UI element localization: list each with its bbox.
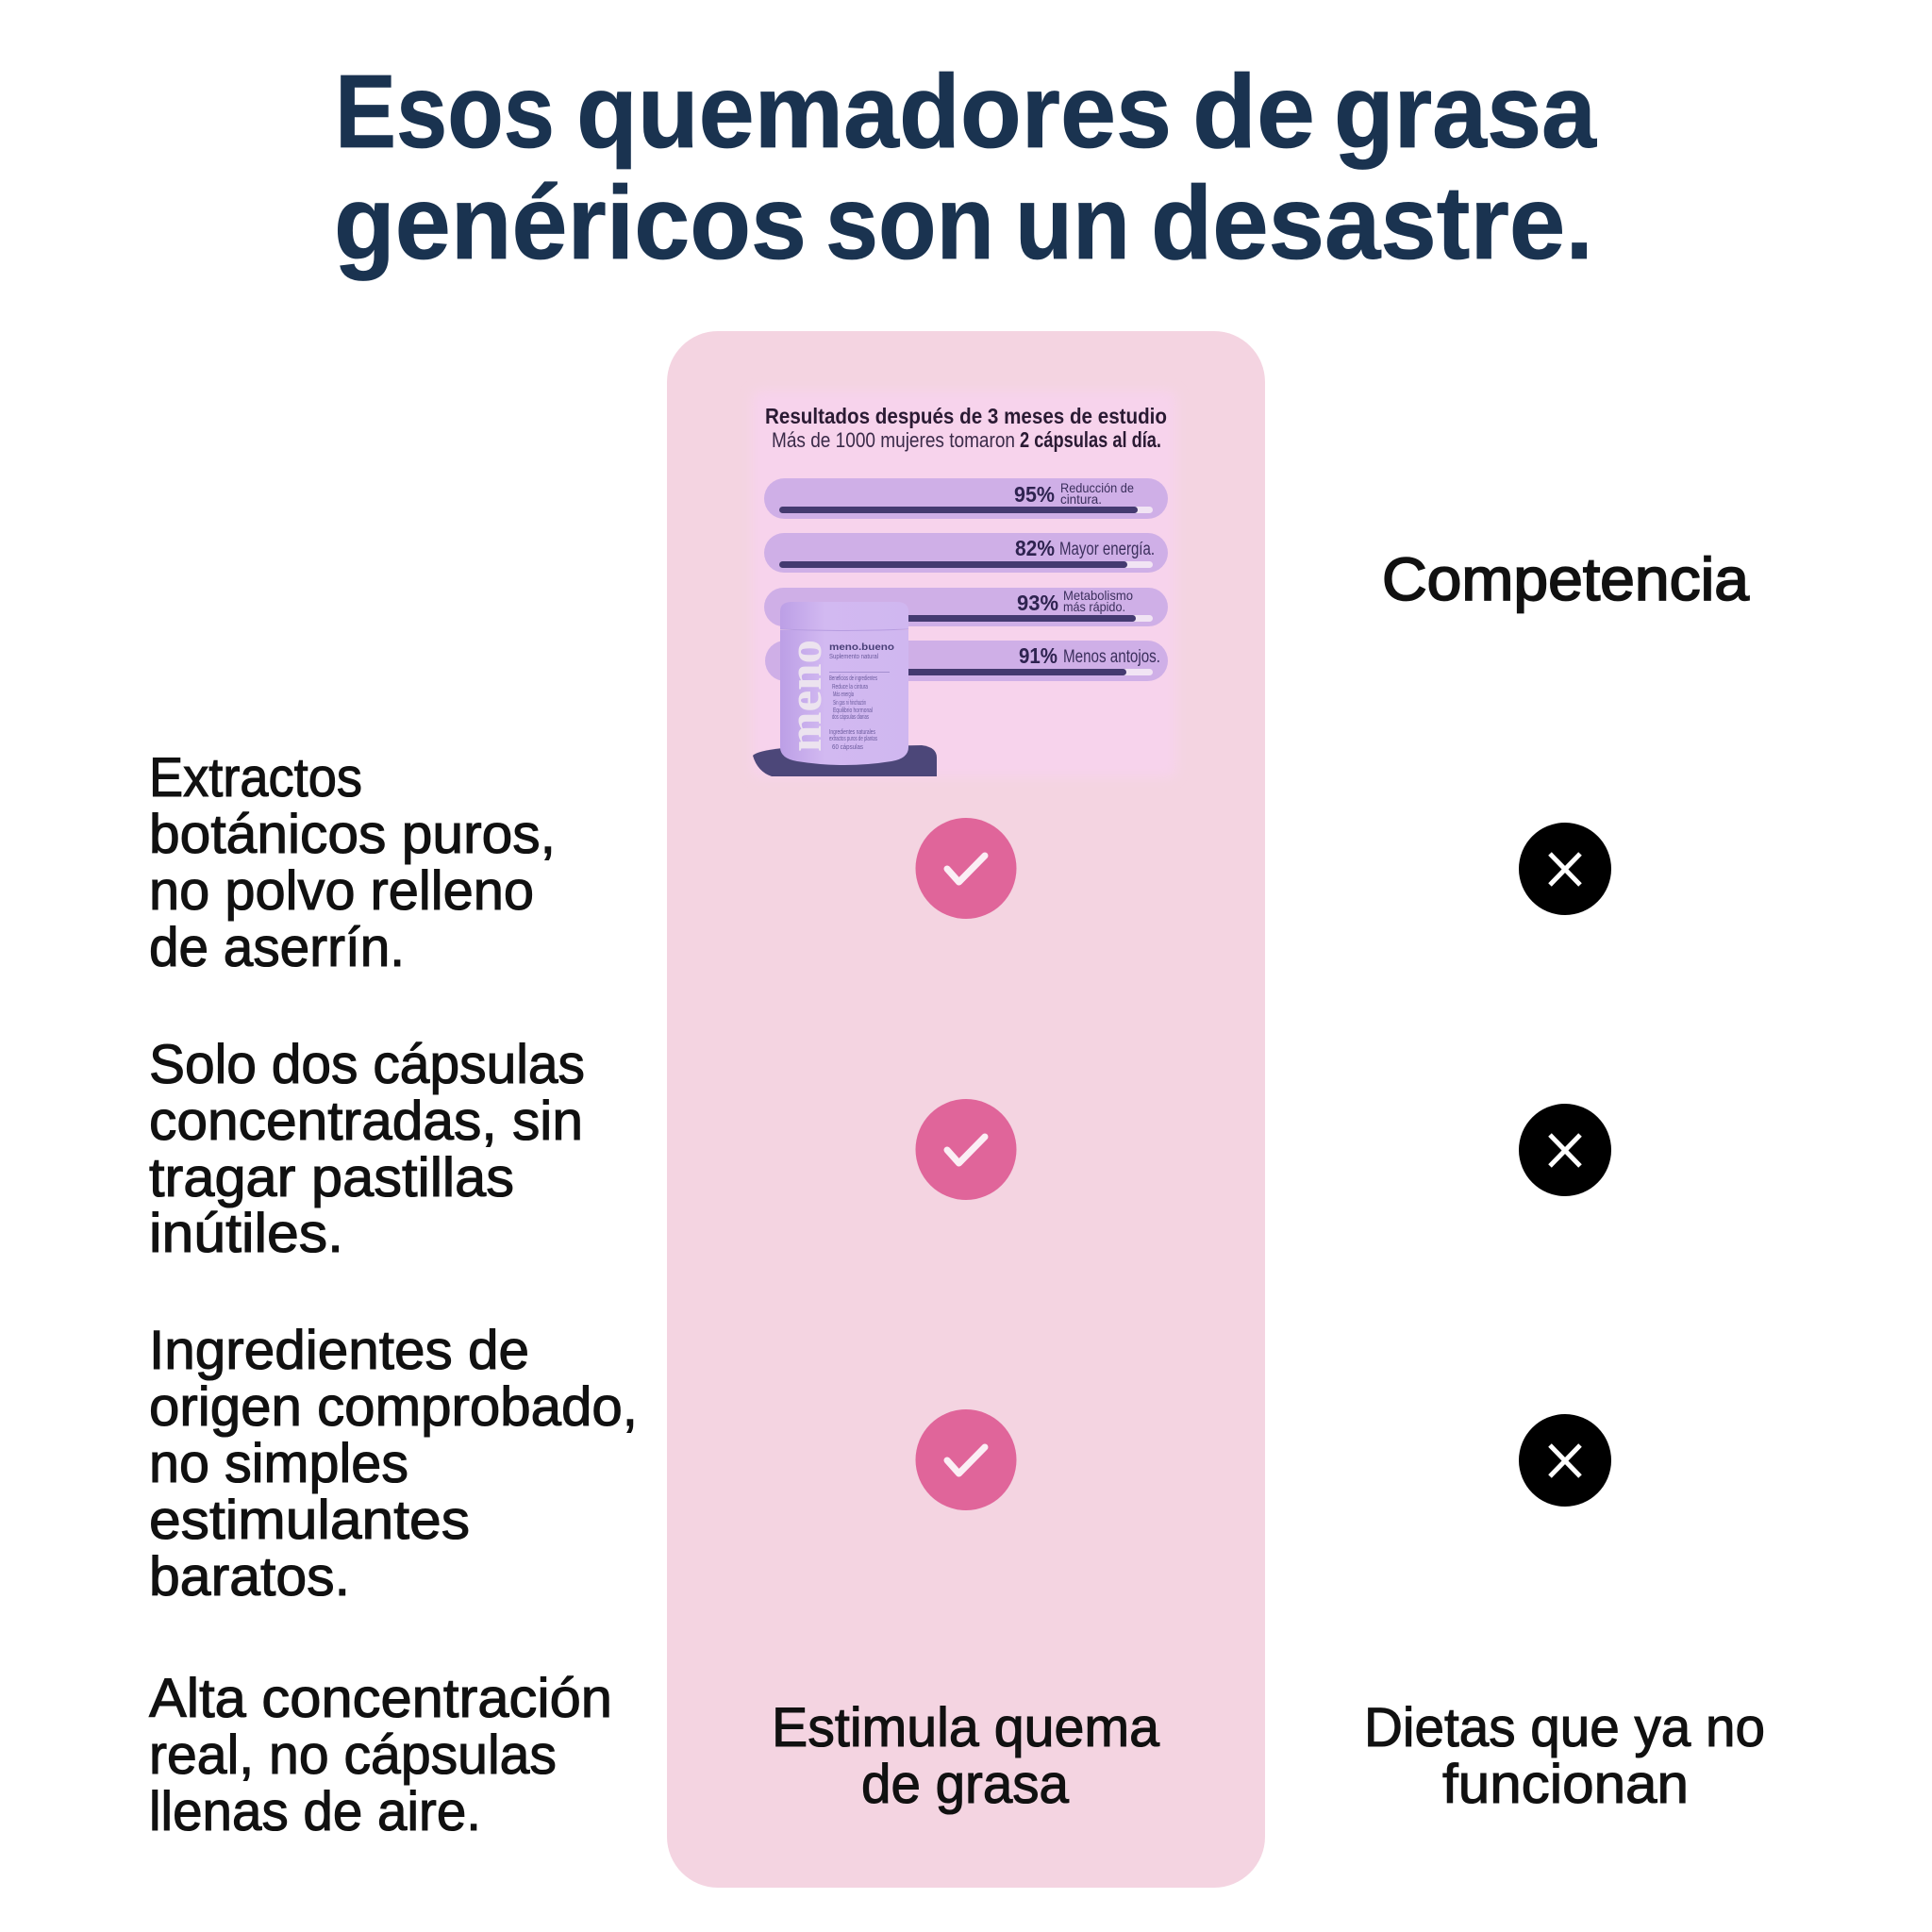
competitor column footer label: funcionan <box>1442 1754 1689 1815</box>
title <box>334 54 1597 281</box>
icon: cross row 2 <box>1519 1104 1611 1196</box>
image heading: 2 cápsulas al día. <box>1020 427 1161 452</box>
icon: cross row 1 <box>1519 823 1611 915</box>
title: Esos <box>335 54 555 170</box>
image heading <box>765 404 1167 452</box>
feature text 2: inútiles. <box>149 1203 343 1264</box>
stat bar: 82%: Mayor energía. <box>1059 540 1155 559</box>
feature text 3: Ingredientes de <box>149 1320 529 1381</box>
jar label text: Más energía <box>833 691 854 698</box>
feature text 1: de aserrín. <box>149 917 405 978</box>
jar label text: dos cápsulas diarias <box>832 714 869 721</box>
stat bar: 91%: Menos antojos. <box>1063 647 1160 667</box>
feature text 4: Alta concentración <box>149 1668 612 1729</box>
stat bar: 91%: 91% <box>1019 643 1058 668</box>
title: genéricos <box>334 165 807 281</box>
stat bar: 95% <box>764 478 1168 519</box>
jar label text: extractos puros de plantas <box>829 736 877 742</box>
jar label text: Sin gas ni hinchazón <box>833 700 866 707</box>
jar label text: Ingredientes naturales <box>829 729 875 736</box>
feature text 3: no simples <box>149 1433 408 1494</box>
feature text 3: estimulantes <box>149 1490 470 1551</box>
product column footer label <box>772 1697 1160 1815</box>
jar label text: Equilibrio hormonal <box>833 708 873 714</box>
stat bar: 95%: 95% <box>1014 482 1055 507</box>
product results image <box>752 391 1176 777</box>
stat bar: 93%: 93% <box>1017 591 1058 615</box>
jar vertical logo: meno <box>778 640 831 752</box>
stat bar: 82% <box>764 533 1168 573</box>
title: un <box>1015 165 1130 281</box>
feature text 3 <box>149 1320 638 1607</box>
title: grasa <box>1334 54 1597 170</box>
feature text 4: llenas de aire. <box>149 1781 481 1842</box>
jar label text: meno.bueno <box>829 642 894 653</box>
platform under jar <box>753 745 937 776</box>
feature text 2: concentradas, sin <box>149 1091 583 1152</box>
feature text 3: baratos. <box>149 1546 350 1607</box>
stat bar: 95%: cintura. <box>1060 491 1102 507</box>
image heading: Más de 1000 mujeres tomaron <box>772 428 1015 452</box>
feature text 1: Extractos <box>149 747 362 808</box>
feature text 3: origen comprobado, <box>149 1376 638 1438</box>
feature text 1: botánicos puros, <box>149 804 556 865</box>
icon: check row 2 <box>915 1099 1017 1200</box>
panel: product column <box>667 331 1265 1888</box>
icon: check row 1 <box>915 818 1017 919</box>
jar label text: 60 cápsulas <box>832 744 863 751</box>
stat bar: 82%: 82% <box>1015 536 1055 560</box>
feature text 2: tragar pastillas <box>149 1147 514 1208</box>
feature text 1: no polvo relleno <box>149 860 534 922</box>
title: de <box>1192 54 1315 170</box>
jar label text <box>829 642 894 751</box>
column heading: Competencia: Competencia <box>1382 545 1749 613</box>
stat bar: 93%: más rápido. <box>1063 599 1125 614</box>
image heading: Resultados después de 3 meses de estudio <box>765 404 1167 428</box>
jar label text: Reduce la cintura <box>832 684 868 691</box>
product column footer label: Estimula quema <box>772 1697 1160 1758</box>
stat bar: 93%: Metabolismo <box>1063 588 1133 603</box>
feature text 2 <box>149 1034 585 1264</box>
feature text 4 <box>149 1668 612 1842</box>
feature text 1 <box>149 747 556 978</box>
stat bar: 93% <box>764 588 1168 626</box>
title: son <box>825 165 994 281</box>
icon: check row 3 <box>915 1409 1017 1510</box>
competitor column footer label <box>1364 1697 1765 1815</box>
title: quemadores <box>576 54 1172 170</box>
feature text 2: Solo dos cápsulas <box>149 1034 585 1095</box>
jar label text: Suplemento natural <box>829 654 878 660</box>
stat bar: 95%: Reducción de <box>1060 480 1134 495</box>
jar label text: Beneficios de ingredientes <box>829 675 877 682</box>
product column footer label: de grasa <box>861 1754 1070 1815</box>
competitor column footer label: Dietas que ya no <box>1364 1697 1765 1758</box>
feature text 4: real, no cápsulas <box>149 1724 557 1786</box>
icon: cross row 3 <box>1519 1414 1611 1507</box>
title: desastre. <box>1151 165 1593 281</box>
stat bar: 91% <box>765 641 1168 681</box>
product jar <box>778 602 908 765</box>
